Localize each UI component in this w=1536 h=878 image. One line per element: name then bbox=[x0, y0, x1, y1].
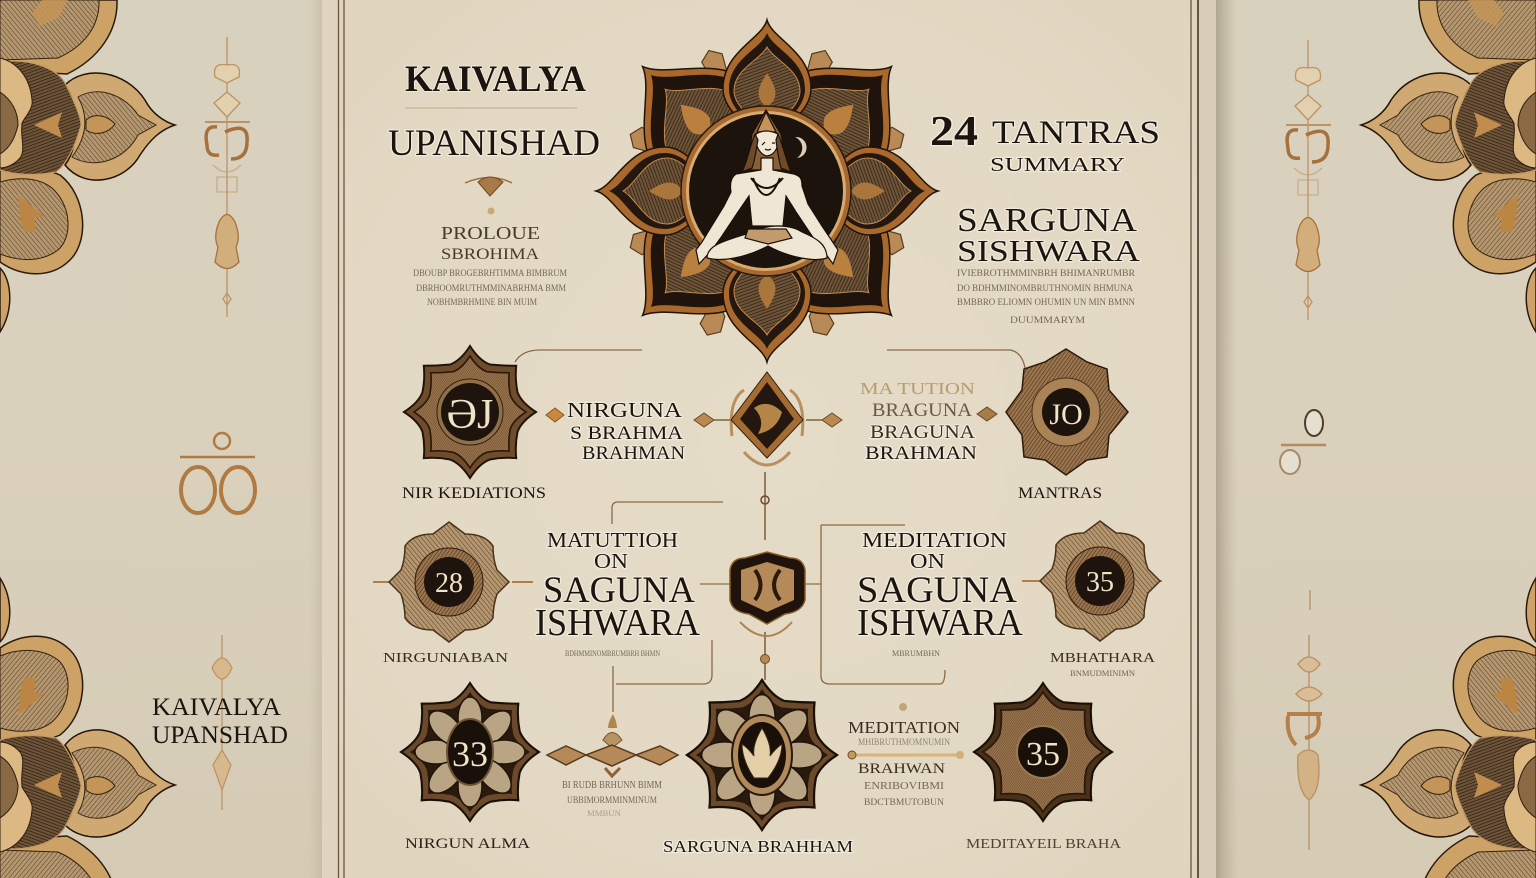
row 1 right badge: JO bbox=[1049, 398, 1083, 431]
diagonal petals bbox=[599, 23, 935, 359]
row 3 middle ornament with caption bbox=[547, 714, 678, 818]
left side panel decoration bbox=[0, 0, 322, 878]
connector lines bbox=[515, 350, 1025, 712]
row 3 left lotus badge: 33 bbox=[452, 734, 488, 774]
title ornament bbox=[405, 108, 577, 214]
meditating figure bbox=[696, 110, 838, 264]
text: Matution Braguna Brahman: BRAGUNA bbox=[870, 422, 975, 443]
text: Nirguna Brahma Brahman: S BRAHMA bbox=[570, 423, 683, 444]
corner mandala bottom-right bbox=[1361, 578, 1536, 878]
text: Nirguna Brahma Brahman: BRAHMAN bbox=[582, 443, 685, 464]
text: Nirguna Brahma Brahman bbox=[567, 398, 685, 464]
row 3 middle ornament with caption: BI RUDB BRHUNN BIMM bbox=[562, 780, 662, 791]
row 3 left lotus badge bbox=[401, 683, 539, 821]
connector dot right bbox=[977, 407, 997, 421]
vertical ornament left top bbox=[205, 37, 250, 317]
heading: Sarguna Sishwara: BMBBRO ELIOMN OHUMIN UN MIN BMNN bbox=[957, 297, 1135, 307]
text: Matution on Saguna Ishwara: ISHWARA bbox=[535, 602, 701, 644]
label: Mantras: MANTRAS bbox=[1018, 485, 1102, 502]
row 1 right badge bbox=[1006, 349, 1128, 475]
label: Nir meditations: NIR KEDIATIONS bbox=[402, 485, 546, 502]
text: Meditation on Saguna Ishwara: MEDITATION bbox=[862, 528, 1007, 552]
vertical ornament right bottom bbox=[1287, 590, 1322, 850]
text: Matution Braguna Brahman: BRAHMAN bbox=[865, 443, 977, 464]
prologue text block: DBOUBP BROGEBRHTIMMA BIMBRUM bbox=[413, 268, 567, 278]
central paper panel bbox=[322, 0, 1216, 878]
row 1 left badge: ƏJ bbox=[447, 392, 493, 438]
text: Meditation Brahwan caption: ENRIBOVIBMI bbox=[864, 781, 944, 792]
text: Matution Braguna Brahman: BRAGUNA bbox=[872, 400, 972, 421]
label: Meditayeil Braha: MEDITAYEIL BRAHA bbox=[966, 837, 1122, 852]
heading: Sarguna Sishwara: SARGUNA bbox=[957, 202, 1137, 239]
prologue text block: DBRHOOMRUTHMMINABRHMA BMM bbox=[416, 283, 566, 293]
row 3 right badge: 35 bbox=[1026, 736, 1060, 773]
corner mandala top-left bbox=[0, 0, 175, 332]
ornamental knots between petals bbox=[626, 46, 908, 339]
text: Matution on Saguna Ishwara: MATUTTIOH bbox=[547, 528, 678, 552]
om symbol left bbox=[180, 433, 255, 513]
prologue text block: NOBHMBRHMINE BIN MUIM bbox=[427, 297, 537, 307]
text: Matution Braguna Brahman: MA TUTION bbox=[860, 379, 975, 398]
crescent moon bbox=[795, 137, 807, 158]
text: Meditation Brahwan caption: BRAHWAN bbox=[858, 761, 945, 777]
text: Meditation on Saguna Ishwara bbox=[857, 528, 1024, 644]
vertical ornament left bottom bbox=[212, 635, 232, 810]
prologue text block bbox=[413, 223, 567, 307]
label: Nirgun Alma: NIRGUN ALMA bbox=[405, 836, 530, 852]
label: Bhathara: BNMUDMINIMN bbox=[1070, 669, 1135, 678]
row 2 right badge: 35 bbox=[1086, 567, 1114, 598]
prologue text block: PROLOUE bbox=[441, 223, 540, 243]
heading: 24 Tantras summary: 24 bbox=[930, 109, 978, 155]
prologue text block: SBROHIMA bbox=[441, 246, 540, 263]
heading: Sarguna Sishwara: DO BDHMMINOMBRUTHNOMIN BHMUNA bbox=[957, 283, 1133, 293]
text: Meditation on Saguna Ishwara: ISHWARA bbox=[857, 602, 1024, 644]
row 1 center ornament bbox=[694, 372, 842, 504]
heading: 24 Tantras summary bbox=[930, 109, 1160, 176]
text: Meditation on Saguna Ishwara: ON bbox=[910, 549, 945, 573]
corner mandala top-right bbox=[1361, 0, 1536, 332]
row 3 middle ornament with caption: UBBIMORMMINMINUM bbox=[567, 795, 657, 805]
medallion ring bbox=[681, 106, 851, 276]
om symbol right bbox=[1280, 410, 1326, 474]
connector dot bbox=[546, 408, 564, 422]
icon: lotus bbox=[742, 728, 782, 778]
text: Nirguna Brahma Brahman: NIRGUNA bbox=[567, 398, 683, 422]
row 2 left badge: 28 bbox=[435, 568, 463, 599]
row 2 center ornament bbox=[700, 552, 822, 664]
corner mandala bottom-left bbox=[0, 578, 175, 878]
text: Matution on Saguna Ishwara bbox=[535, 528, 701, 644]
small caption: BDHMMINOMBRUMBRH BHMN bbox=[565, 649, 660, 658]
main title bbox=[388, 59, 600, 164]
left border band bbox=[322, 0, 337, 878]
side title: Kaivalya Upanishad: UPANSHAD bbox=[152, 722, 288, 749]
paper sheet bbox=[322, 0, 1216, 878]
right panel shadow bbox=[1216, 0, 1238, 878]
row 3 center lotus badge bbox=[687, 680, 837, 830]
vertical ornament right top bbox=[1286, 40, 1331, 320]
heading: Sarguna Sishwara: SISHWARA bbox=[957, 233, 1141, 268]
right side panel decoration bbox=[1216, 0, 1536, 878]
heading: Sarguna Sishwara bbox=[957, 202, 1141, 325]
row 3 right badge bbox=[974, 683, 1112, 821]
heading: 24 Tantras summary: TANTRAS bbox=[992, 115, 1160, 151]
row 3 middle ornament with caption: MMBUN bbox=[587, 809, 621, 818]
row 1 left badge bbox=[404, 346, 536, 478]
text: Meditation on Saguna Ishwara: SAGUNA bbox=[857, 570, 1017, 611]
heading: Sarguna Sishwara: IVIEBROTHMMINBRH BHIMANRUMBR bbox=[957, 268, 1135, 278]
side title: Kaivalya Upanishad bbox=[152, 694, 288, 749]
label: Nirgunibaban: NIRGUNIABAN bbox=[383, 651, 508, 666]
heading: Sarguna Sishwara: DUUMMARYM bbox=[1010, 315, 1085, 325]
main title: UPANISHAD bbox=[388, 123, 600, 164]
left panel shadow bbox=[308, 0, 322, 878]
label: Bhathara: MBRUMBHN bbox=[892, 649, 940, 658]
central mandala with meditating figure bbox=[596, 20, 938, 362]
heading: 24 Tantras summary: SUMMARY bbox=[990, 154, 1125, 176]
label: Bhathara: MBHATHARA bbox=[1050, 651, 1156, 666]
row 2 left badge bbox=[373, 522, 533, 642]
side title: Kaivalya Upanishad: KAIVALYA bbox=[152, 694, 281, 721]
text: Matution on Saguna Ishwara: SAGUNA bbox=[543, 570, 695, 611]
text: Meditation Brahwan caption: MEDITATION bbox=[848, 718, 960, 737]
row 2 right badge bbox=[1022, 521, 1162, 641]
label: Bhathara bbox=[892, 649, 1156, 678]
right border band bbox=[1199, 0, 1216, 878]
label: Sarguna Brahham: SARGUNA BRAHHAM bbox=[663, 837, 853, 856]
text: Matution on Saguna Ishwara: ON bbox=[594, 549, 628, 573]
text: Meditation Brahwan caption: MHIBRUTHMOMNUMIN bbox=[858, 737, 950, 747]
main title: KAIVALYA bbox=[405, 59, 586, 100]
text: Meditation Brahwan caption: BDCTBMUTOBUN bbox=[864, 797, 945, 807]
axial petals bbox=[596, 20, 938, 362]
text: Matution Braguna Brahman bbox=[860, 379, 977, 464]
text: Meditation Brahwan caption bbox=[848, 703, 964, 807]
